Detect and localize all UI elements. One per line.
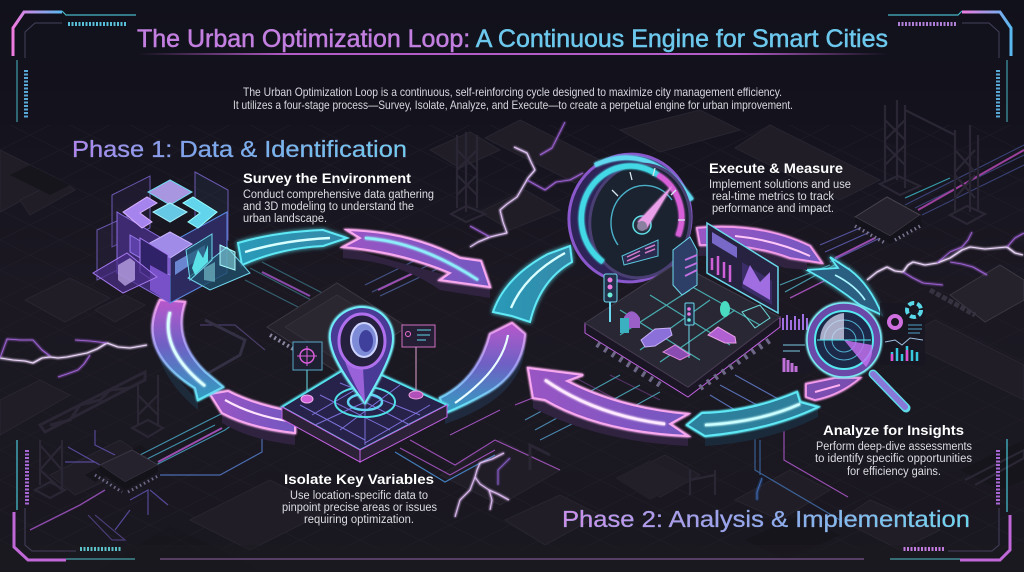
text block: survey the environment: Survey the Environment bbox=[243, 170, 411, 186]
arrow: small pink bbox=[806, 378, 860, 400]
icon: data cube bbox=[93, 172, 250, 303]
text block: survey the environment: Conduct comprehensive data gathering bbox=[243, 189, 434, 201]
arrow: bottom-left pink bbox=[210, 391, 295, 445]
arrow: cyan bottom bbox=[687, 392, 818, 446]
text block: execute and measure: performance and impact. bbox=[712, 203, 834, 215]
city building bbox=[673, 237, 697, 295]
heading: phase 2: Phase 2: Analysis & Implementation bbox=[562, 506, 970, 532]
chip pins bbox=[597, 340, 770, 388]
text block: execute and measure bbox=[709, 160, 851, 215]
target box bbox=[293, 342, 322, 370]
arrow: lower right of ring one bbox=[440, 323, 525, 424]
gauge readout bbox=[622, 240, 658, 265]
map base bbox=[282, 363, 447, 450]
icon: city chip platform bbox=[585, 223, 780, 397]
text block: isolate key variables: Isolate Key Variables bbox=[284, 471, 434, 487]
traffic light 2 bbox=[685, 303, 694, 358]
cube left face bbox=[117, 212, 170, 303]
text block: analyze for insights bbox=[815, 422, 972, 478]
text block: execute and measure: Execute & Measure bbox=[709, 160, 843, 176]
icon: map tile and location pin bbox=[282, 307, 447, 462]
intro text: The Urban Optimization Loop is a continuous, self-reinforcing cycle designed to maximize city management efficiency. bbox=[243, 85, 782, 99]
small chip bottom-left bbox=[95, 450, 158, 492]
frame bottom-right bbox=[890, 439, 1010, 560]
hologram panels bbox=[97, 172, 228, 280]
intro text bbox=[233, 85, 793, 112]
arrow: left cyan bbox=[152, 300, 223, 410]
towers bbox=[35, 100, 1024, 498]
cube right face bbox=[170, 212, 227, 303]
gauge needle bbox=[638, 186, 672, 229]
text block: isolate key variables: Use location-specific data to bbox=[290, 490, 428, 502]
text block: analyze for insights: Perform deep-dive assessments bbox=[816, 441, 972, 453]
icon: magnifying glass bbox=[807, 303, 906, 408]
circuit traces bbox=[30, 145, 1024, 540]
small chip top-right bbox=[855, 197, 922, 244]
text block: isolate key variables bbox=[282, 471, 437, 526]
text block: survey the environment: urban landscape. bbox=[243, 213, 327, 225]
data tile cyan bbox=[188, 247, 250, 290]
text block: analyze for insights: Analyze for Insights bbox=[823, 422, 964, 438]
server block right bbox=[930, 265, 1024, 322]
text block: execute and measure: real-time metrics to track bbox=[712, 191, 834, 203]
info box bbox=[402, 325, 435, 347]
frame bottom-left bbox=[14, 440, 135, 560]
lightning bolts bbox=[0, 122, 1024, 517]
icon: analysis charts bbox=[782, 303, 925, 373]
arrow: cyan top right bbox=[807, 257, 882, 315]
dashboard screen bbox=[707, 223, 778, 313]
icon: speedometer gauge bbox=[559, 144, 701, 292]
text block: survey the environment: and 3D modeling to understand the bbox=[243, 201, 414, 213]
text block: analyze for insights: to identify specific opportunities bbox=[815, 453, 972, 465]
city streets bbox=[620, 280, 760, 362]
data tile purple bbox=[93, 253, 157, 293]
text block: isolate key variables: requiring optimization. bbox=[304, 514, 414, 526]
map pin bbox=[330, 307, 393, 403]
frame top-right bbox=[888, 11, 1011, 122]
arrow: top right pink bbox=[343, 230, 490, 298]
title: The Urban Optimization Loop: A Continuous Engine for Smart Cities bbox=[137, 25, 888, 53]
text block: survey the environment bbox=[243, 170, 434, 225]
top chevrons bbox=[148, 180, 192, 205]
arrow: pink top bbox=[697, 227, 822, 270]
text block: isolate key variables: pinpoint precise areas or issues bbox=[282, 502, 437, 514]
central chip behind pin bbox=[267, 283, 407, 372]
gauge scale bbox=[581, 166, 658, 262]
frame top-left bbox=[13, 11, 136, 122]
traffic light bbox=[604, 274, 617, 322]
heading: phase 1: Phase 1: Data & Identification bbox=[72, 136, 407, 162]
arrow: cyan rising to gauge bbox=[493, 246, 572, 322]
arrow: survey to top bbox=[238, 230, 347, 265]
text block: execute and measure: Implement solutions and use bbox=[709, 179, 851, 191]
arrow: pink under chip bbox=[528, 368, 688, 446]
intro text: It utilizes a four-stage process—Survey, Isolate, Analyze, and Execute—to create a perpetual engine for urban improvement. bbox=[233, 98, 793, 112]
text block: analyze for insights: for efficiency gains. bbox=[847, 466, 941, 478]
cars bbox=[641, 328, 672, 347]
